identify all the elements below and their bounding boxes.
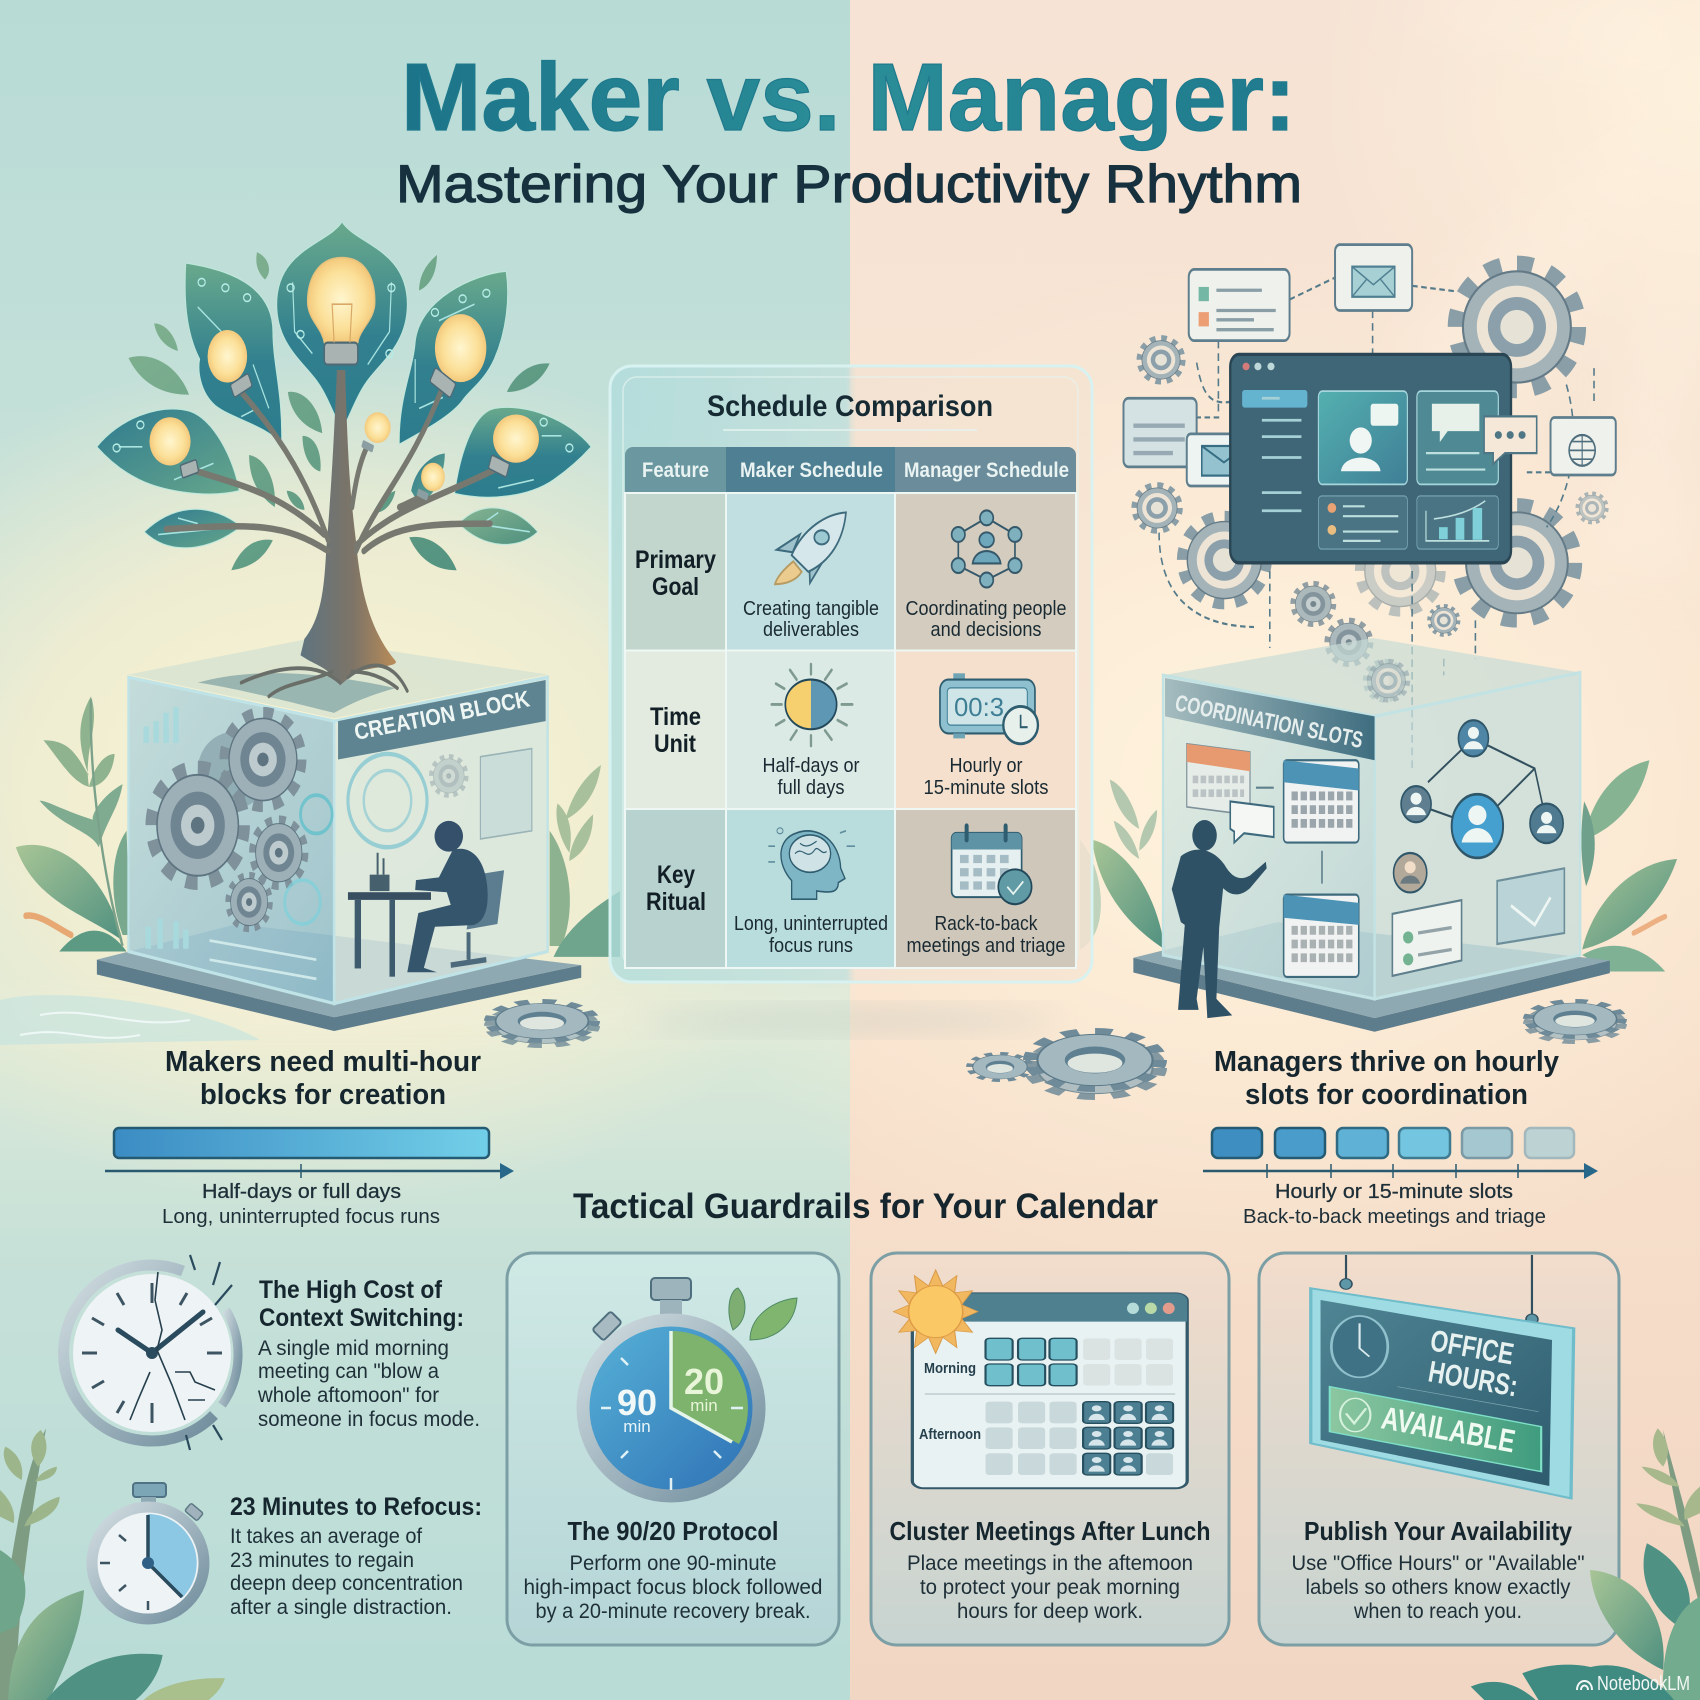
text block: availability body	[1292, 1552, 1584, 1623]
left tips: refocus	[92, 1483, 482, 1619]
text block: availability body: when to reach you.	[1353, 1600, 1522, 1623]
manager timeline caption: slots for coordination	[1245, 1079, 1528, 1111]
icon: rocket	[775, 512, 846, 584]
icon: 90/20 stopwatch	[583, 1278, 797, 1496]
heading: tactical guardrails: Tactical Guardrails for Your Calendar	[573, 1187, 1158, 1226]
panel: the 90/20 protocol: The 90/20 Protocol	[568, 1516, 778, 1546]
table cell text: and decisions	[930, 619, 1042, 641]
floor gears	[491, 1001, 1621, 1096]
table header row: Manager Schedule	[904, 459, 1069, 482]
icon: stopwatch	[92, 1483, 204, 1619]
icon: cracked clock	[64, 1255, 238, 1450]
manager axis arrow	[1203, 1163, 1598, 1179]
table cell text: Long, uninterrupted	[734, 913, 888, 935]
plant: bottom right overlapping availability card	[1471, 1428, 1700, 1700]
title	[396, 44, 1302, 214]
table cell text	[734, 598, 1066, 957]
text block: cluster meetings body: hours for deep work.	[957, 1600, 1143, 1623]
icon: digital timer	[940, 673, 1038, 744]
label: creation block: CREATION BLOCK	[352, 685, 532, 745]
text block: context switching body: someone in focus mode.	[258, 1408, 480, 1431]
manager timeline caption: Back-to-back meetings and triage	[1243, 1206, 1546, 1228]
coordination block glass cube	[1133, 638, 1610, 1032]
floating app windows	[1123, 245, 1616, 486]
icon: light bulb tree	[97, 222, 591, 696]
text block: refocus body: deepn deep concentration	[230, 1572, 463, 1595]
table cell icons	[768, 510, 1038, 904]
title: Maker vs. Manager:	[401, 44, 1296, 151]
text block: 90/20 body: by a 20-minute recovery break.	[536, 1600, 810, 1623]
text block: availability body: Use "Office Hours" or "Available"	[1292, 1552, 1584, 1575]
text block: 90/20 body: Perform one 90-minute	[570, 1552, 776, 1575]
icon: 90/20 stopwatch: min	[623, 1417, 651, 1436]
manager figure	[1172, 820, 1267, 1018]
icon: calendar with check	[952, 826, 1032, 904]
row labels	[635, 546, 716, 916]
plants behind coordination block	[1080, 760, 1677, 971]
left tips: context switching	[64, 1255, 480, 1450]
panel: the 90/20 protocol	[507, 1253, 839, 1645]
text block: cluster meetings body	[907, 1552, 1193, 1623]
icon: bulbs	[149, 258, 539, 501]
maker axis arrow	[105, 1163, 514, 1179]
title: Mastering Your Productivity Rhythm	[396, 155, 1302, 214]
icon: 90/20 stopwatch: 20	[684, 1361, 724, 1402]
connector lines	[1159, 278, 1594, 769]
label: coordination slots: COORDINATION SLOTS	[1173, 689, 1365, 753]
icon: office hours sign: OFFICE	[1428, 1324, 1516, 1371]
calendar row labels	[919, 1360, 981, 1443]
text block: refocus body: 23 minutes to regain	[230, 1549, 414, 1572]
text block: refocus body	[230, 1525, 463, 1619]
table cell text: full days	[778, 777, 844, 799]
row labels: Ritual	[646, 888, 706, 916]
left tips: refocus: 23 Minutes to Refocus:	[230, 1493, 482, 1521]
icon: half sun half moon	[772, 664, 852, 746]
maker timeline caption: Makers need multi-hour	[165, 1046, 481, 1078]
maker timeline caption: blocks for creation	[200, 1079, 446, 1111]
text block: 90/20 body: high-impact focus block followed	[524, 1576, 822, 1599]
table cell text: Rack-to-back	[934, 913, 1038, 935]
manager timeline caption	[1203, 1046, 1598, 1228]
illustration: maker tree and creation block	[16, 222, 620, 1031]
panel: cluster meetings after lunch: Cluster Meetings After Lunch	[890, 1516, 1210, 1546]
icon: brain in head	[768, 828, 855, 899]
left tips: context switching: Context Switching:	[259, 1304, 464, 1332]
table header row: Feature	[642, 459, 709, 482]
text block: availability body: labels so others know exactly	[1306, 1576, 1571, 1599]
table cell text: 15-minute slots	[924, 777, 1048, 799]
panel: cluster meetings after lunch	[871, 1253, 1229, 1645]
network avatars	[1392, 720, 1564, 976]
row labels: Key	[657, 861, 695, 889]
timer digits: 00:3	[954, 692, 1004, 722]
manager timeline caption: Managers thrive on hourly	[1214, 1046, 1559, 1078]
icon: office hours sign: AVAILABLE	[1379, 1399, 1518, 1459]
text block: refocus body: after a single distraction.	[230, 1596, 452, 1619]
dashboard screen	[1230, 354, 1537, 563]
text block: context switching body: A single mid morning	[258, 1337, 449, 1360]
table cell text: Coordinating people	[906, 598, 1066, 620]
plants behind creation block	[16, 696, 620, 957]
table cells background	[625, 493, 1076, 968]
manager timeline caption: Hourly or 15-minute slots	[1275, 1181, 1513, 1203]
table header row: Maker Schedule	[740, 459, 883, 482]
creation block glass cube	[129, 677, 548, 1004]
row labels: Goal	[652, 573, 699, 601]
row labels: Unit	[654, 730, 697, 758]
person at desk	[348, 821, 504, 977]
maker timeline caption	[105, 1046, 514, 1228]
maker time bar	[114, 1128, 489, 1158]
text block: context switching body: whole aftomoon" for	[257, 1384, 439, 1407]
text block: context switching body	[257, 1337, 480, 1431]
table cell text: Half-days or	[762, 755, 860, 777]
table cell text: focus runs	[769, 935, 853, 957]
left tips: context switching: The High Cost of	[259, 1276, 443, 1304]
text block: refocus body: It takes an average of	[230, 1525, 422, 1548]
text block: 90/20 body	[524, 1552, 822, 1623]
maker timeline caption: Half-days or full days	[202, 1181, 401, 1203]
icon: office hours sign: HOURS:	[1426, 1355, 1520, 1404]
icon: calendar window with sun	[893, 1270, 1187, 1488]
icon: people network	[952, 510, 1022, 588]
text block: cluster meetings body: to protect your peak morning	[920, 1576, 1180, 1599]
panel: publish your availability	[1259, 1253, 1619, 1645]
panel: publish your availability: Publish Your Availability	[1304, 1516, 1572, 1546]
icon: 90/20 stopwatch: 90	[617, 1382, 657, 1423]
table cell text: meetings and triage	[906, 935, 1066, 957]
maker timeline caption: Long, uninterrupted focus runs	[162, 1206, 440, 1228]
gears behind dashboard	[1134, 264, 1607, 700]
calendars	[1187, 744, 1359, 977]
calendar row labels: Afternoon	[919, 1426, 981, 1443]
calendar row labels: Morning	[924, 1360, 976, 1377]
panel: schedule comparison	[610, 366, 1092, 982]
manager time slots	[1212, 1128, 1574, 1158]
icon: office hours sign	[1311, 1255, 1574, 1498]
illustration: manager dashboard and coordination block	[1080, 245, 1677, 1032]
table cell text: Creating tangible	[743, 598, 879, 620]
text block: context switching body: meeting can "blow a	[258, 1360, 439, 1383]
text block: cluster meetings body: Place meetings in the aftemoon	[907, 1552, 1193, 1575]
heading: schedule comparison: Schedule Comparison	[707, 390, 993, 423]
table header row	[625, 447, 1076, 493]
plant: bottom left	[0, 1428, 225, 1700]
row labels: Primary	[635, 546, 716, 574]
table cell text: deliverables	[763, 619, 859, 641]
table cell text: Hourly or	[950, 755, 1023, 777]
row labels: Time	[650, 703, 701, 731]
cube base plate and top face	[97, 639, 581, 1031]
icon: 90/20 stopwatch: min	[690, 1396, 718, 1415]
